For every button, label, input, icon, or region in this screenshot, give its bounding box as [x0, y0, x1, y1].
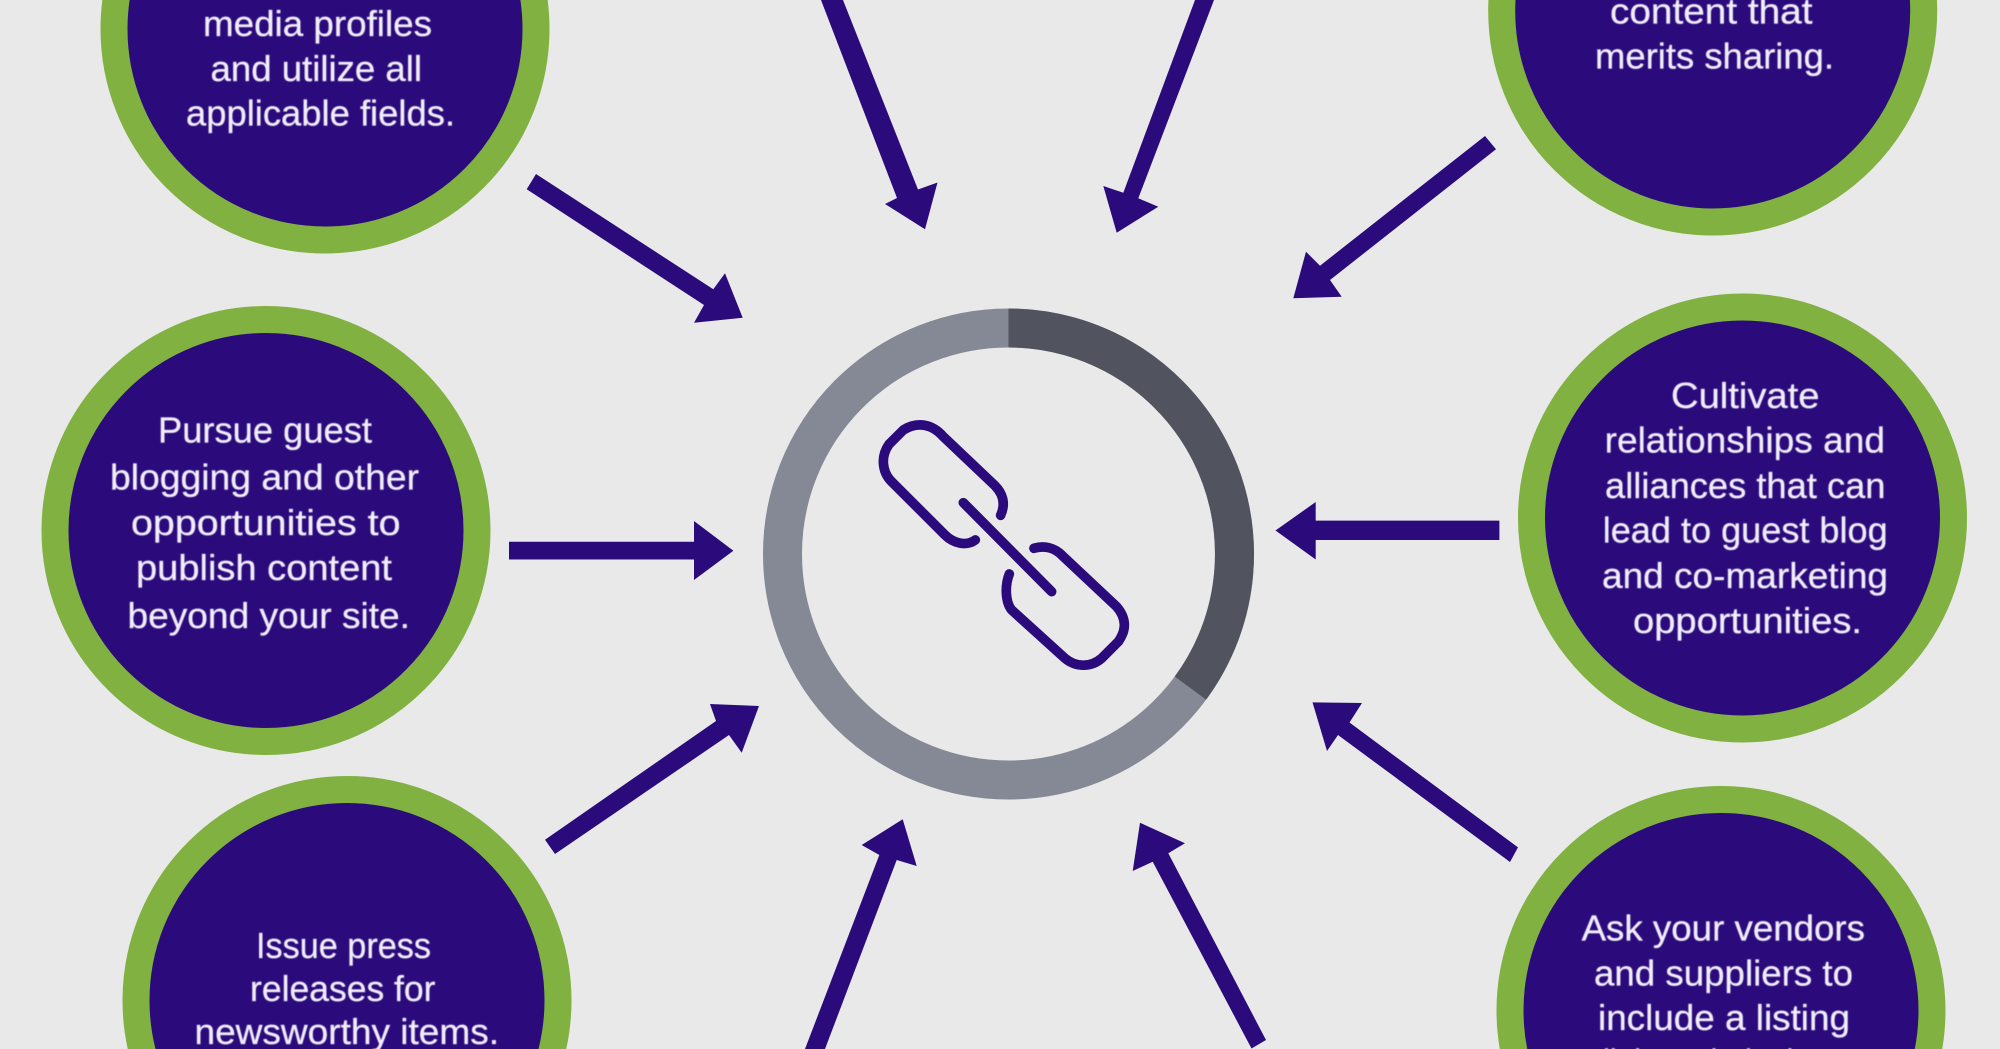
arrow: bottom centre-right to center	[1133, 823, 1266, 1048]
text: press releases tip	[194, 925, 499, 1049]
text: guest blogging tip: publish content	[136, 547, 392, 588]
text: vendors and suppliers tip	[1582, 908, 1865, 1049]
text: vendors and suppliers tip: include a listing	[1598, 997, 1850, 1038]
text: social media profiles tip: and utilize all	[210, 48, 422, 89]
arrow: right circle to center	[1276, 502, 1499, 560]
arrow: left circle to center	[509, 521, 733, 580]
icon: chain link	[883, 425, 1124, 665]
text: press releases tip: releases for	[250, 968, 436, 1009]
text: vendors and suppliers tip: and suppliers to	[1594, 952, 1853, 994]
text: relationships tip: alliances that can	[1605, 465, 1886, 506]
panel: guest blogging	[55, 320, 477, 742]
panel: complete social media profiles	[114, 0, 536, 240]
arrow: top centre-left to center	[821, 0, 938, 229]
panel: relationships and alliances	[1532, 307, 1954, 729]
text: relationships tip: lead to guest blog	[1603, 510, 1888, 550]
panel: shareable content	[1502, 0, 1924, 222]
text: relationships tip: relationships and	[1605, 420, 1885, 461]
text: relationships tip: opportunities.	[1633, 600, 1862, 641]
arrow: top right circle to center	[1293, 136, 1496, 298]
arrow: top centre-right to center	[1103, 0, 1214, 233]
text: guest blogging tip: blogging and other	[110, 456, 419, 498]
text: shareable content tip: merits sharing.	[1595, 36, 1834, 76]
text: guest blogging tip: beyond your site.	[128, 595, 410, 636]
text: social media profiles tip: media profiles	[203, 3, 432, 44]
arrow: bottom right circle to center	[1312, 702, 1518, 862]
panel: vendors and suppliers	[1510, 800, 1932, 1049]
text: guest blogging tip: Pursue guest	[158, 410, 372, 450]
central ring	[782, 328, 1234, 780]
text: relationships tip: Cultivate	[1671, 375, 1820, 416]
text: social media profiles tip: applicable fields.	[186, 92, 455, 134]
text: vendors and suppliers tip: Ask your vendors	[1582, 908, 1865, 948]
arrow: bottom centre-left to center	[805, 819, 917, 1049]
arrow: top left circle to center	[527, 174, 743, 323]
text: press releases tip: Issue press	[256, 925, 431, 966]
panel: press releases	[136, 790, 558, 1049]
text: relationships tip	[1602, 375, 1888, 641]
text: social media profiles tip	[186, 3, 455, 134]
ring: dark segment	[1008, 328, 1234, 688]
text: guest blogging tip	[110, 410, 419, 636]
text: relationships tip: and co-marketing	[1602, 555, 1888, 596]
text: shareable content tip	[1595, 0, 1834, 76]
text: guest blogging tip: opportunities to	[131, 502, 400, 543]
arrow: bottom left circle to center	[545, 704, 759, 854]
